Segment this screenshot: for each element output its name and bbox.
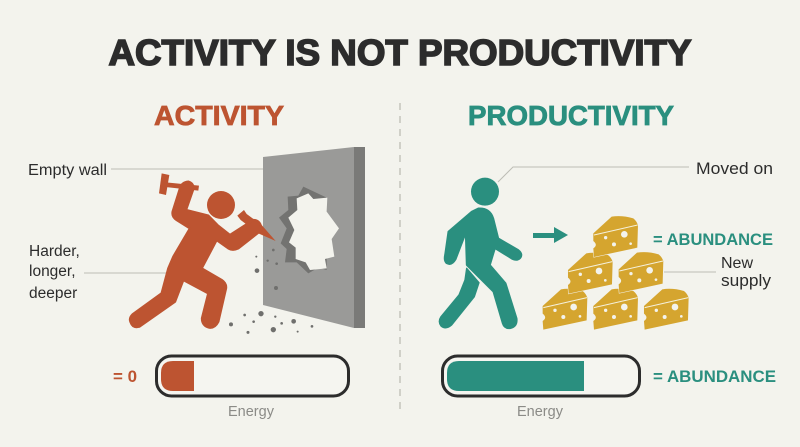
- label: harder, longer, deeper: [29, 243, 170, 302]
- label: new supply: New: [721, 255, 753, 272]
- heading: productivity: PRODUCTIVITY: [468, 100, 674, 131]
- wall with hole: [263, 147, 365, 328]
- arrow: [533, 227, 568, 243]
- label: harder, longer, deeper: deeper: [29, 285, 77, 302]
- hole opening: [288, 193, 339, 270]
- label: new supply: [664, 255, 772, 290]
- divider: [399, 103, 401, 415]
- label: moved on: Moved on: [696, 160, 773, 178]
- energy bar: productivity: Energy: [517, 404, 564, 420]
- label: new supply: supply: [721, 272, 772, 290]
- label: abundance near cheese: = ABUNDANCE: [653, 231, 773, 249]
- energy bar: activity: Energy: [228, 404, 275, 420]
- label: harder, longer, deeper: longer,: [29, 263, 76, 280]
- rear leg: [439, 268, 479, 328]
- label: moved on: [498, 160, 773, 182]
- label: harder, longer, deeper: Harder,: [29, 243, 80, 260]
- energy bar: productivity: [442, 356, 776, 420]
- icon: cheese pile: [543, 216, 689, 330]
- energy bar: productivity: = ABUNDANCE: [653, 367, 776, 386]
- hammer: [159, 173, 199, 195]
- icon: hammering figure: [130, 173, 276, 328]
- hole shadow: [279, 187, 339, 273]
- head: [471, 178, 499, 206]
- body: [130, 182, 262, 328]
- chisel: [237, 210, 276, 241]
- icon: walking figure: [439, 178, 521, 328]
- heading: activity: ACTIVITY: [154, 100, 284, 131]
- debris: [229, 249, 313, 334]
- title: ACTIVITY IS NOT PRODUCTIVITY: [108, 32, 692, 73]
- energy bar: activity: = 0: [113, 368, 137, 386]
- head: [207, 191, 235, 219]
- energy bar: activity: [113, 356, 348, 420]
- body and arms: [445, 208, 521, 328]
- label: empty wall: Empty wall: [28, 162, 107, 179]
